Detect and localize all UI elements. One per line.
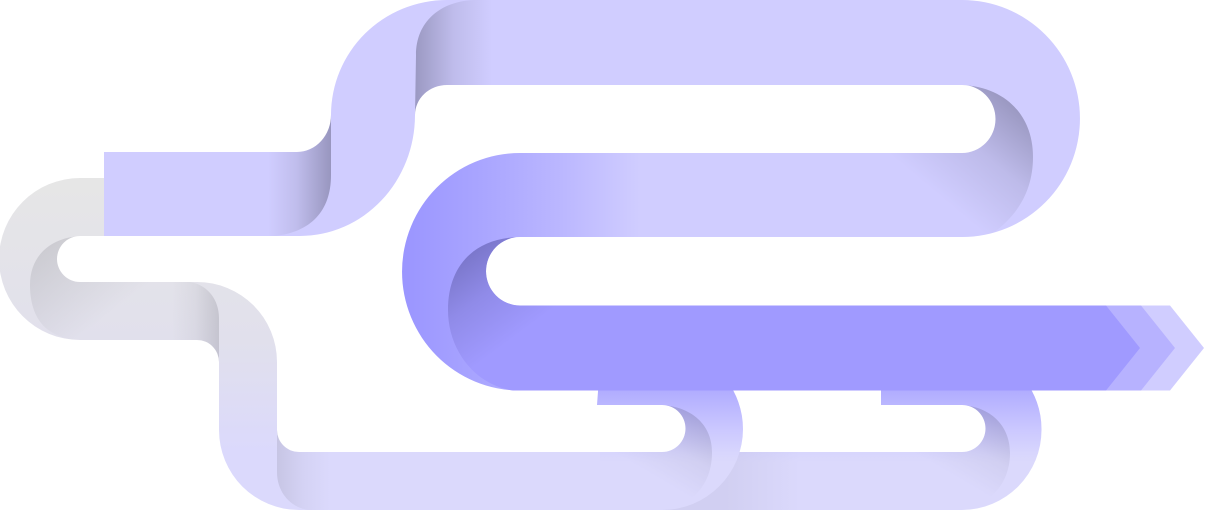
middle chevron [1100,306,1175,390]
curved band [402,153,640,390]
fold: lower left bend [277,430,330,510]
second lower U-turn ribbon [660,378,1042,510]
fold: second U-turn [905,405,1010,510]
fold: S-curve upper [415,0,492,115]
shadow cast by first U-turn [662,452,800,510]
outer chevron [1120,306,1204,390]
main upper ribbon [104,0,1080,237]
grey ribbon band [0,178,680,510]
fold base: left bend [448,237,570,390]
fold: grey left bend [30,236,155,340]
arrow band [520,306,1140,390]
fold: first U-turn [605,405,712,510]
main purple ribbon with arrow [402,153,1204,390]
fold: S-curve lower [268,115,331,236]
fold shade: left bend [448,237,570,390]
fold: right bend [880,85,1033,237]
first lower U-turn ribbon [597,378,743,510]
fold: grey middle bend [172,282,219,362]
